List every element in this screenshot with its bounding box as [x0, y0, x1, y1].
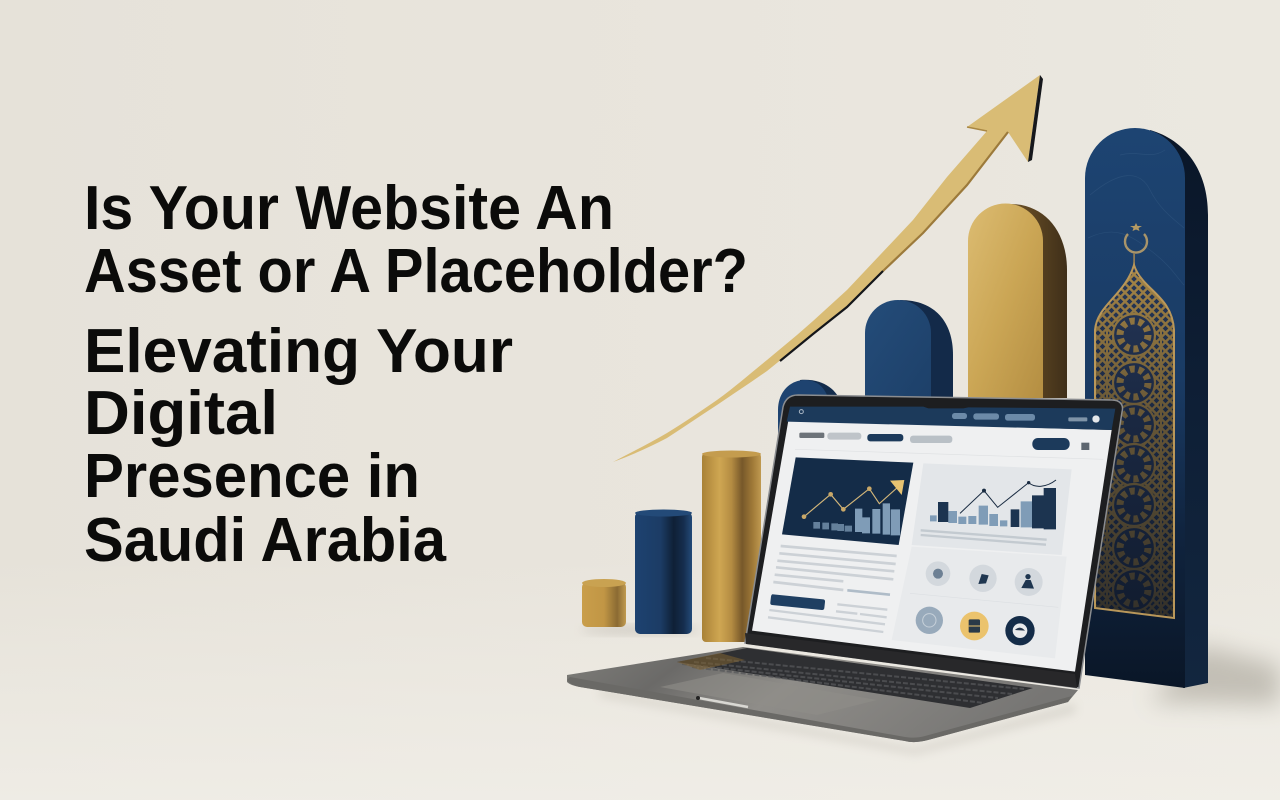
text placeholder lines [773, 546, 897, 595]
keyboard [677, 648, 1033, 708]
arrow: rising growth arrow [613, 75, 1043, 462]
title: headline text [84, 174, 748, 575]
icon: navy ring [1005, 616, 1035, 645]
pillar: gold [968, 204, 1067, 398]
mihrab arch pattern [1094, 262, 1176, 620]
cylinder: small gold [582, 579, 626, 627]
pillar: mid navy [865, 300, 953, 398]
light bar chart card [912, 463, 1072, 555]
secondary text lines [768, 604, 887, 632]
heading line: subject: Digital [84, 379, 278, 448]
cylinder: tall gold [702, 450, 761, 642]
site header bar [787, 407, 1115, 430]
heading line: question [84, 174, 748, 306]
icon: gold stack [960, 612, 989, 640]
cylinder: navy [635, 510, 692, 634]
dark growth chart card [782, 457, 913, 545]
front notch [699, 698, 748, 707]
site navigation [795, 433, 1103, 459]
icon: rocket [969, 565, 997, 592]
icon grid panel [892, 547, 1067, 658]
pillar: small navy [778, 380, 842, 440]
icon: globe [926, 561, 950, 586]
laptop base [567, 647, 1078, 742]
ground shadows [580, 626, 1280, 754]
icon: person [1015, 568, 1043, 596]
laptop screen [752, 407, 1115, 672]
icon: check circle [916, 607, 943, 634]
call to action button [770, 594, 825, 610]
icon: crescent and star [1125, 223, 1147, 266]
screen surface [752, 421, 1112, 672]
laptop hinge bar [745, 633, 1077, 688]
laptop lid frame [745, 395, 1123, 688]
laptop [567, 395, 1123, 742]
heading line: subject [84, 317, 513, 575]
heading line: subject: Presence in [84, 442, 420, 511]
heading line: subject: Elevating Your [84, 317, 513, 386]
heading line: subject: Saudi Arabia [84, 506, 446, 575]
trackpad [660, 673, 877, 715]
pillar: tall navy with mihrab [1085, 128, 1208, 688]
heading line: question: Asset or A Placeholder? [84, 237, 748, 306]
heading line: question: Is Your Website An [84, 174, 614, 243]
